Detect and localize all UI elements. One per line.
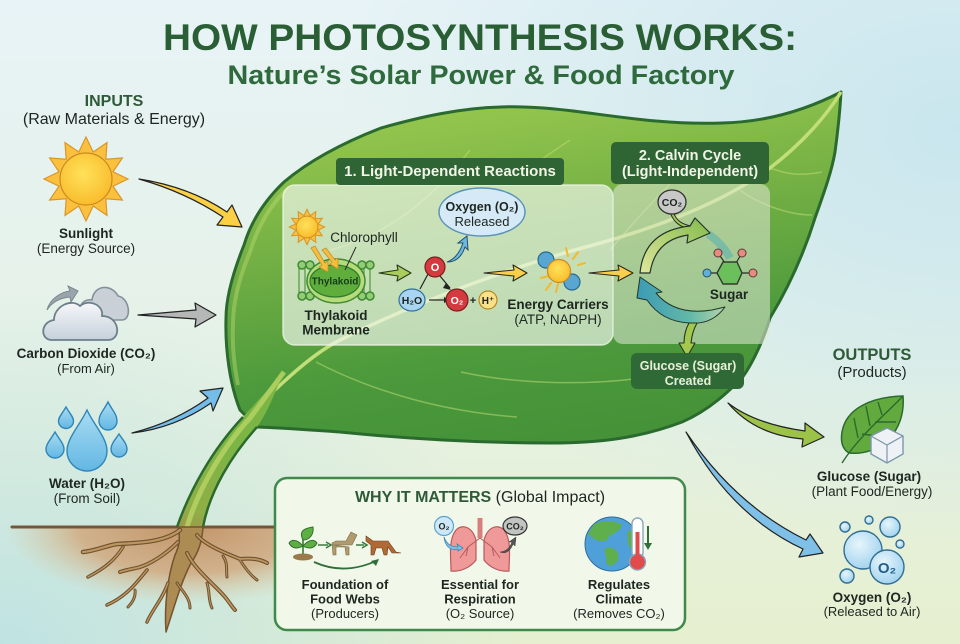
- water label: [49, 476, 125, 506]
- panel heading 1: 1. Light-Dependent Reactions: [344, 163, 556, 180]
- sugar label: Sugar: [710, 287, 749, 302]
- energy carriers label: Energy Carriers: [507, 297, 609, 312]
- climate label: (Removes CO₂): [573, 606, 665, 621]
- soil and ground line: [0, 527, 276, 644]
- water label: Water (H₂O): [49, 476, 125, 491]
- impact panel background: [275, 478, 685, 630]
- icon: small sun: [289, 209, 325, 245]
- water split diagram: H₂O: [402, 295, 422, 307]
- arrow: oxygen release: [447, 236, 468, 262]
- title: HOW PHOTOSYNTHESIS WORKS:: [163, 16, 797, 58]
- title: [163, 16, 797, 90]
- icon: food web: [289, 527, 401, 569]
- carbon dioxide label: (From Air): [57, 361, 115, 376]
- co2 input: CO₂: [662, 197, 683, 209]
- arrow: calvin cycle upper: [640, 218, 710, 273]
- water split diagram: O: [431, 262, 440, 274]
- water split diagram: [399, 257, 497, 311]
- panel heading 1: [336, 158, 564, 185]
- climate label: Regulates: [588, 577, 650, 592]
- co2 input: [658, 190, 692, 228]
- inputs heading: INPUTS: [85, 93, 144, 110]
- panel heading 2: (Light-Independent): [622, 164, 758, 180]
- leaf: [226, 92, 841, 443]
- glucose output label: (Plant Food/Energy): [812, 484, 932, 499]
- water split diagram: H⁺: [482, 296, 494, 307]
- roots: [83, 527, 267, 632]
- energy carriers label: (ATP, NADPH): [514, 312, 602, 327]
- icon: thylakoid membrane: [298, 259, 374, 303]
- arrow: carbon dioxide to leaf: [138, 303, 216, 327]
- icon: water drops: [46, 402, 127, 471]
- arrow: glucose output: [728, 403, 824, 447]
- icon: oxygen bubbles: [840, 516, 904, 584]
- oxygen released bubble: Released: [455, 214, 509, 229]
- icon: lungs: O₂: [438, 522, 450, 532]
- arrow: energy to calvin cycle: [589, 265, 633, 281]
- inputs heading: (Raw Materials & Energy): [23, 111, 205, 128]
- panel heading 2: 2. Calvin Cycle: [639, 148, 741, 164]
- arrow: glucose created: [679, 323, 697, 357]
- arrow: to energy carriers: [484, 265, 527, 281]
- water label: (From Soil): [54, 491, 120, 506]
- sunlight label: Sunlight: [59, 226, 113, 241]
- oxygen output label: (Released to Air): [824, 604, 920, 619]
- oxygen released bubble: Oxygen (O₂): [446, 200, 518, 214]
- water split diagram: +: [470, 295, 476, 307]
- thylakoid membrane label: Membrane: [302, 322, 370, 338]
- carbon dioxide label: [17, 346, 155, 376]
- icon: lungs: CO₂: [506, 522, 524, 532]
- icon: leaf and sugar cube: [841, 396, 903, 463]
- icon: thylakoid membrane: Thylakoid: [312, 276, 358, 288]
- stem: [177, 372, 284, 527]
- food webs label: (Producers): [311, 606, 379, 621]
- panel: light-dependent reactions: [283, 158, 613, 345]
- oxygen released bubble: [439, 188, 525, 236]
- respiration label: Essential for: [441, 577, 519, 592]
- panel: calvin cycle: [589, 142, 770, 389]
- chlorophyll label: [330, 230, 398, 270]
- glucose output label: Glucose (Sugar): [817, 469, 921, 484]
- oxygen output label: Oxygen (O₂): [833, 590, 911, 605]
- glucose created label: Created: [665, 374, 711, 388]
- panel: why it matters: [275, 478, 685, 630]
- carbon dioxide label: Carbon Dioxide (CO₂): [17, 346, 155, 361]
- icon: oxygen bubbles: O₂: [878, 560, 896, 577]
- impact heading: WHY IT MATTERS (Global Impact): [355, 489, 605, 506]
- outputs heading: [833, 346, 911, 381]
- outputs heading: (Products): [837, 364, 907, 381]
- panel background 2: [613, 184, 770, 344]
- icon: globe and thermometer: [585, 517, 652, 571]
- oxygen output label: [824, 590, 920, 619]
- arrow: sunlight to leaf: [139, 179, 242, 227]
- icon: cloud: [43, 286, 128, 340]
- sunlight rays: [311, 246, 338, 272]
- food webs label: Food Webs: [310, 592, 380, 606]
- respiration label: Respiration: [444, 592, 516, 606]
- panel background 1: [283, 185, 613, 345]
- arrow: oxygen output: [686, 432, 823, 557]
- title: Nature’s Solar Power & Food Factory: [228, 60, 735, 90]
- glucose created label: Glucose (Sugar): [640, 359, 736, 373]
- thylakoid membrane label: Thylakoid: [304, 308, 368, 323]
- panel heading 2: [611, 142, 769, 184]
- climate label: Climate: [596, 592, 642, 606]
- inputs heading: [23, 93, 205, 128]
- icon: sugar molecule: [703, 249, 757, 284]
- chlorophyll label: Chlorophyll: [330, 230, 398, 245]
- arrow: water to leaf: [132, 388, 223, 433]
- glucose created label: [631, 353, 744, 389]
- food webs label: Foundation of: [302, 577, 388, 592]
- icon: lungs: [434, 516, 527, 571]
- respiration label: (O₂ Source): [446, 606, 514, 621]
- glucose output label: [812, 469, 932, 499]
- sunlight label: [37, 226, 135, 256]
- arrow: thylakoid to water split: [379, 265, 411, 281]
- icon: sun: [44, 137, 128, 221]
- sunlight label: (Energy Source): [37, 241, 135, 256]
- icon: energy carriers molecule: [538, 248, 585, 292]
- teal link arc: [708, 234, 730, 258]
- arrow: calvin cycle lower: [637, 277, 725, 323]
- outputs heading: OUTPUTS: [833, 346, 911, 364]
- water split diagram: O₂: [451, 295, 464, 307]
